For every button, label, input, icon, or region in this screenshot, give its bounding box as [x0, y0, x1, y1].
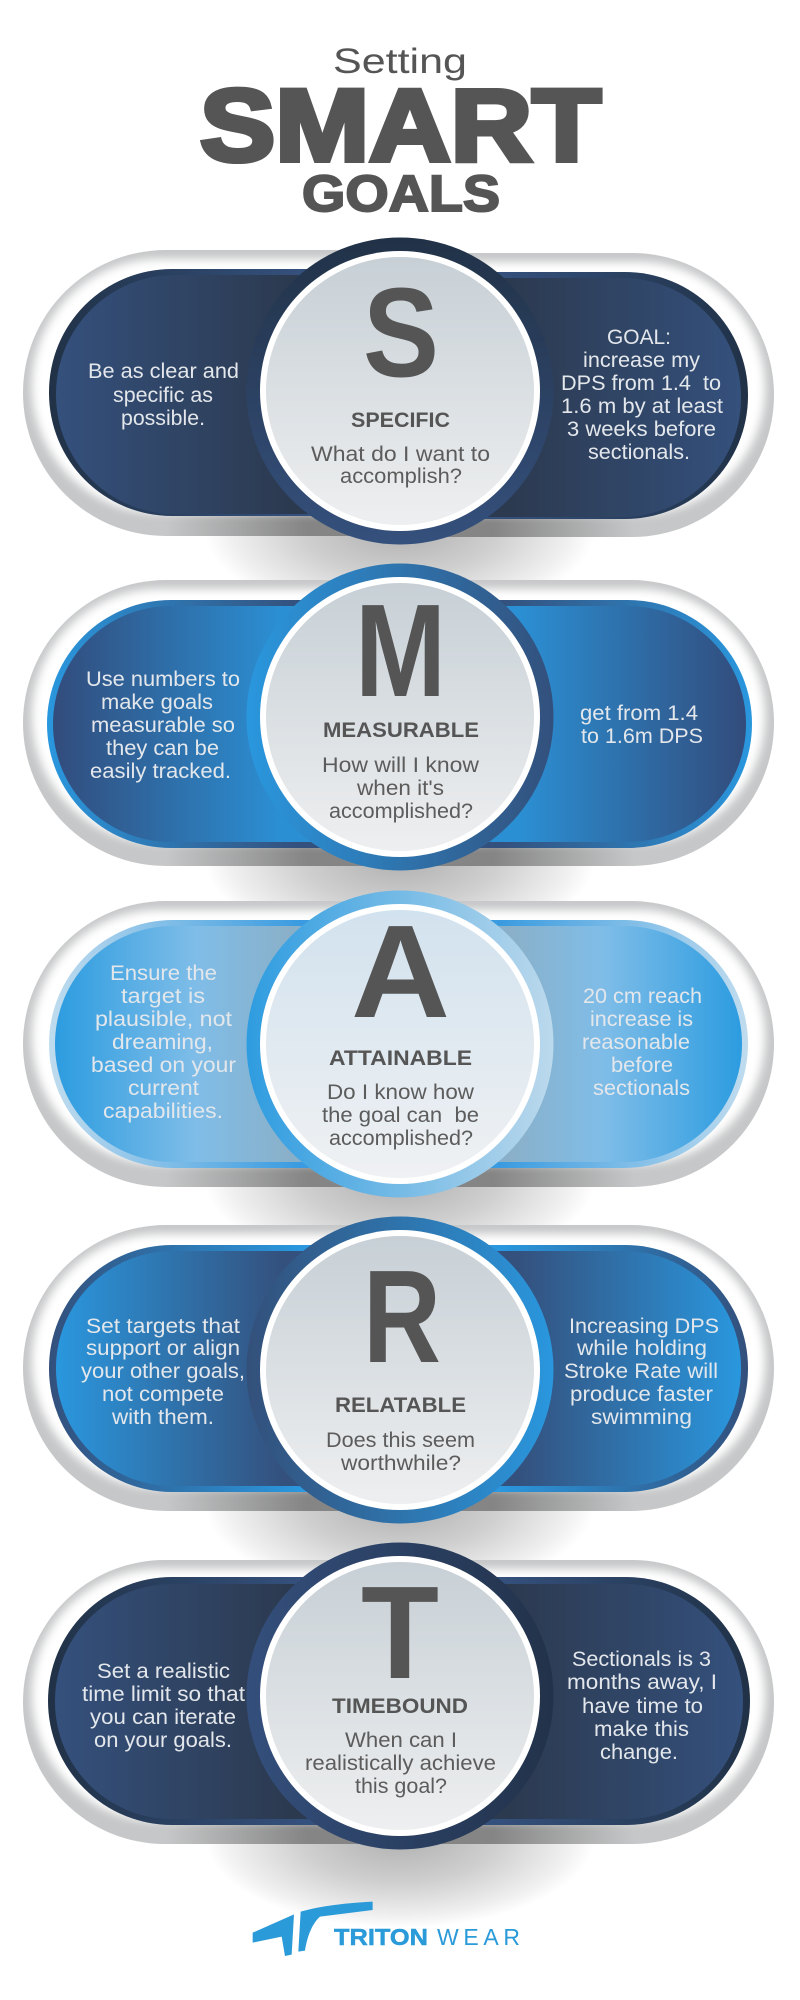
- text: M example: [580, 702, 703, 748]
- text: R advice: your other goals,: [81, 1360, 245, 1383]
- text: S advice: possible.: [121, 407, 205, 430]
- text: S example: sectionals.: [588, 441, 690, 464]
- text: R example: Stroke Rate will: [564, 1360, 718, 1383]
- text: T advice: time limit so that: [82, 1683, 245, 1706]
- letter T: T: [361, 1559, 439, 1706]
- text: S example: DPS from 1.4 to: [561, 372, 721, 395]
- question: A: [322, 1081, 479, 1150]
- pill: S right: [448, 253, 774, 537]
- text: M example: to 1.6m DPS: [581, 725, 703, 748]
- heading: RELATABLE: RELATABLE: [335, 1393, 466, 1417]
- text: A advice: target is: [121, 985, 205, 1008]
- question: T: realistically achieve: [305, 1752, 496, 1775]
- text: A example: reasonable: [582, 1031, 690, 1054]
- letter A: A: [351, 898, 450, 1045]
- question: S: What do I want to: [311, 443, 490, 466]
- text: A example: sectionals: [593, 1077, 690, 1100]
- row: A attainable: [23, 890, 774, 1198]
- pill: M right: [437, 580, 774, 866]
- text: T example: change.: [600, 1741, 678, 1764]
- text: A advice: dreaming,: [112, 1031, 213, 1054]
- pill: R right: [451, 1225, 774, 1511]
- text: A example: increase is: [590, 1008, 693, 1031]
- pill: T left: [23, 1560, 359, 1844]
- text: S example: increase my: [583, 349, 701, 372]
- text: T example: months away, I: [567, 1671, 717, 1694]
- text: T example: have time to: [582, 1695, 703, 1718]
- letter R: R: [363, 1243, 441, 1390]
- circle: A: [246, 890, 554, 1198]
- row: T timebound: [23, 1542, 774, 1850]
- circle: R: [246, 1216, 554, 1524]
- title: Setting: [333, 42, 467, 81]
- pill: R left: [23, 1225, 349, 1511]
- question: R: Does this seem: [326, 1429, 475, 1452]
- text: R advice: support or align: [86, 1337, 240, 1360]
- text: S advice: [88, 360, 239, 430]
- wordmark: WEAR: [437, 1924, 520, 1950]
- text: A example: before: [611, 1054, 673, 1077]
- text: T example: make this: [594, 1718, 689, 1741]
- question: T: When can I: [345, 1729, 457, 1752]
- title: [200, 42, 601, 222]
- text: S example: [561, 326, 723, 464]
- text: T advice: you can iterate: [90, 1706, 236, 1729]
- text: A advice: plausible, not: [95, 1008, 232, 1031]
- circle: M: [246, 564, 554, 870]
- question: M: [322, 754, 480, 823]
- letter M: M: [355, 577, 446, 724]
- question: T: this goal?: [355, 1775, 447, 1798]
- text: R example: while holding: [576, 1337, 707, 1360]
- text: M advice: easily tracked.: [90, 760, 231, 783]
- text: R example: Increasing DPS: [569, 1315, 719, 1338]
- pill: S left: [23, 250, 350, 536]
- text: R example: swimming: [591, 1406, 692, 1429]
- text: A example: [582, 985, 702, 1100]
- text: R advice: [81, 1315, 245, 1429]
- heading: TIMEBOUND: TIMEBOUND: [332, 1694, 468, 1718]
- text: R advice: with them.: [111, 1406, 214, 1429]
- row: M measurable: [23, 564, 774, 870]
- wordmark: [334, 1924, 520, 1950]
- text: R example: produce faster: [570, 1383, 713, 1406]
- question: S: accomplish?: [340, 465, 462, 488]
- text: T advice: on your goals.: [94, 1729, 232, 1752]
- text: A advice: current: [128, 1077, 199, 1100]
- question: A: accomplished?: [329, 1127, 473, 1150]
- question: M: accomplished?: [329, 800, 473, 823]
- row: S specific: [23, 238, 774, 544]
- pill: A left: [23, 901, 344, 1187]
- drop shadows: [205, 440, 595, 1928]
- text: R advice: not compete: [102, 1383, 224, 1406]
- circle: S: [246, 238, 554, 544]
- title: SMART: [200, 68, 601, 182]
- question: T: [305, 1729, 496, 1798]
- pill: M left: [23, 580, 363, 866]
- question: S: [311, 443, 490, 488]
- row: R relatable: [23, 1216, 774, 1524]
- text: S advice: Be as clear and: [88, 360, 239, 383]
- text: A advice: Ensure the: [110, 962, 217, 985]
- logo: TritonWear: [253, 1902, 520, 1956]
- text: A example: 20 cm reach: [583, 985, 702, 1008]
- text: T advice: Set a realistic: [97, 1660, 230, 1683]
- text: M advice: measurable so: [91, 714, 235, 737]
- letter S: S: [363, 262, 439, 404]
- text: T example: Sectionals is 3: [572, 1648, 711, 1671]
- question: M: when it's: [356, 777, 444, 800]
- text: M advice: Use numbers to: [86, 668, 240, 691]
- text: R example: [564, 1315, 719, 1429]
- question: M: How will I know: [322, 754, 480, 777]
- heading: SPECIFIC: SPECIFIC: [351, 408, 450, 432]
- text: T advice: [82, 1660, 245, 1752]
- text: T example: [567, 1648, 717, 1764]
- text: S example: GOAL:: [607, 326, 671, 349]
- text: M advice: they can be: [106, 737, 219, 760]
- text: M advice: make goals: [101, 691, 213, 714]
- question: A: the goal can be: [322, 1104, 479, 1127]
- text: A advice: capabilities.: [103, 1100, 223, 1123]
- circle: T: [246, 1542, 554, 1850]
- icon: trident mark: [253, 1902, 373, 1956]
- text: S example: 1.6 m by at least: [561, 395, 723, 418]
- question: A: Do I know how: [327, 1081, 475, 1104]
- text: M example: get from 1.4: [580, 702, 698, 725]
- pill: T right: [441, 1560, 774, 1844]
- wordmark: TRITON: [334, 1924, 428, 1950]
- heading: ATTAINABLE: ATTAINABLE: [329, 1046, 472, 1070]
- text: S advice: specific as: [113, 384, 213, 407]
- heading: MEASURABLE: MEASURABLE: [323, 718, 479, 742]
- question: R: [326, 1429, 475, 1475]
- text: R advice: Set targets that: [86, 1315, 240, 1338]
- text: M advice: [86, 668, 240, 783]
- text: S example: 3 weeks before: [567, 418, 716, 441]
- title: GOALS: [302, 165, 500, 222]
- text: A advice: based on your: [91, 1054, 236, 1077]
- question: R: worthwhile?: [340, 1452, 461, 1475]
- pill: A right: [456, 901, 774, 1187]
- text: A advice: [91, 962, 236, 1123]
